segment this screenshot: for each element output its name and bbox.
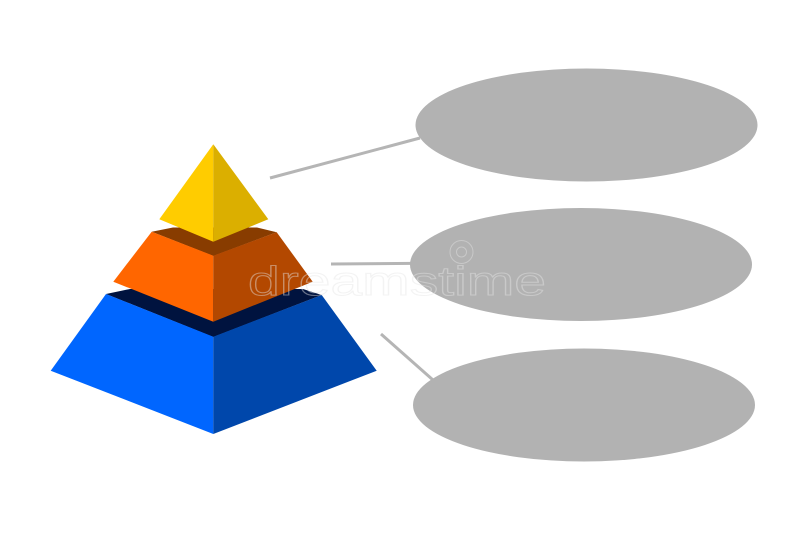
connector: top callout [270,138,420,178]
watermark [248,240,546,304]
callout: top ellipse [416,68,758,182]
bottom tier: blue [51,289,377,434]
middle tier: orange [113,228,313,322]
connector: bottom callout [381,334,433,380]
pyramid [51,144,377,434]
callout: bottom ellipse [413,348,755,462]
watermark text: dreamstime [248,258,546,304]
top tier: yellow [159,144,268,242]
callout: middle ellipse [410,208,752,321]
connector: middle callout [331,262,412,266]
watermark spiral [450,240,473,264]
